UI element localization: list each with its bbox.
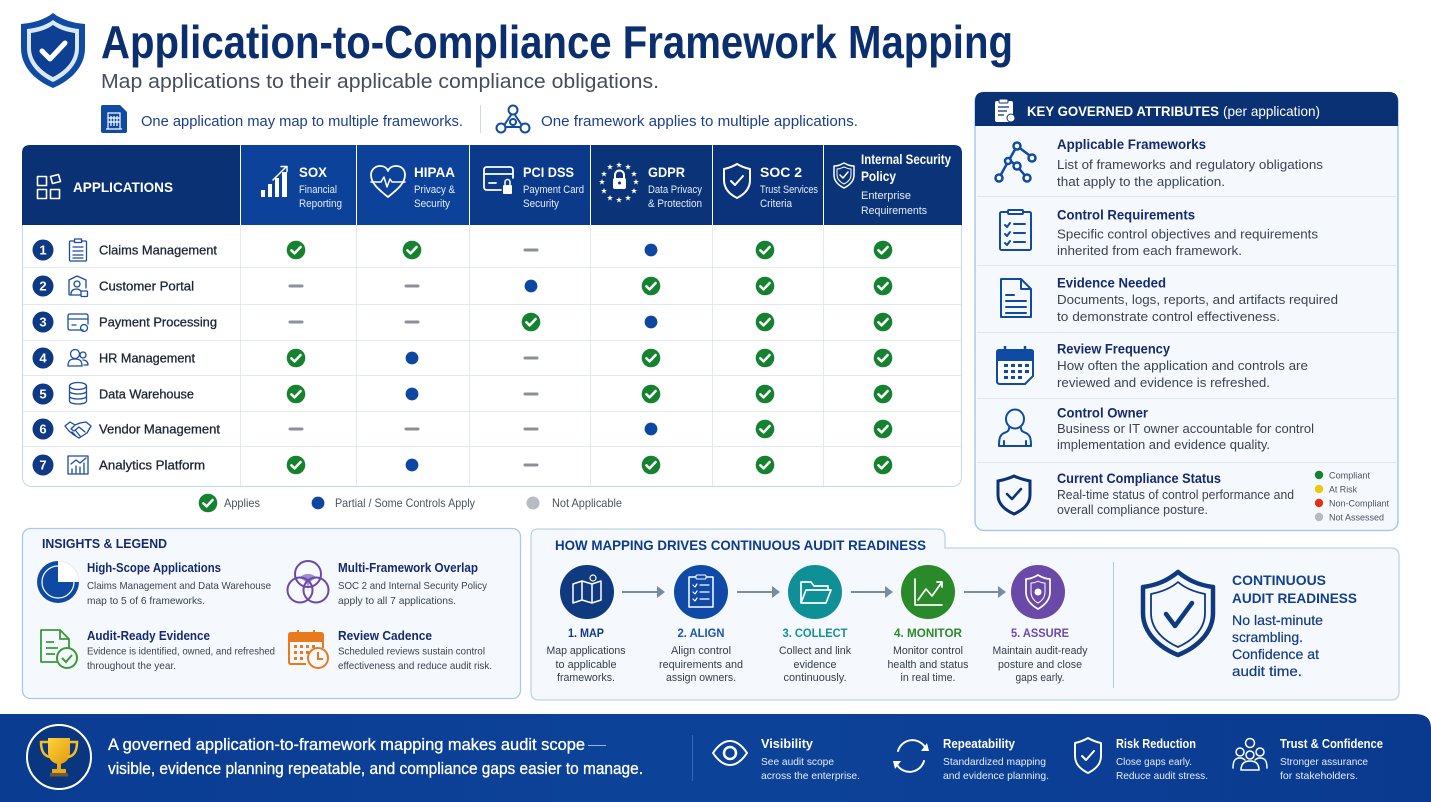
row 1: Claims Management: 1 (39, 242, 47, 258)
insight: high-scope applications (37, 560, 271, 607)
attribute: Control Owner: Control Owner (1057, 406, 1149, 420)
icon: building document (101, 105, 127, 133)
callout: continuous audit readiness: audit time. (1232, 663, 1302, 679)
benefit: risk reduction: Close gaps early. (1116, 756, 1192, 768)
column: GDPR (599, 162, 702, 210)
attribute: Control Owner: Business or IT owner accountable for control (1057, 421, 1314, 436)
benefit: risk reduction: Risk Reduction (1116, 737, 1196, 751)
attribute: Review Frequency: reviewed and evidence is refreshed. (1057, 375, 1270, 390)
column: SOC 2: SOC 2 (760, 164, 802, 180)
step 2: align: requirements and (659, 659, 743, 671)
step 4: monitor: in real time. (900, 672, 956, 684)
column: GDPR: GDPR (648, 164, 685, 180)
attribute: Current Compliance Status: Current Compliance Status (1057, 471, 1221, 486)
attribute: Control Requirements: Control Requirements (1057, 208, 1195, 222)
step 1: map: Map applications (546, 645, 626, 657)
callout: continuous audit readiness: Confidence at (1232, 646, 1319, 662)
row 5: Data Warehouse: Data Warehouse (99, 386, 194, 402)
attribute: Control Requirements: Specific control objectives and requirements (1057, 226, 1319, 242)
key point: one application to many frameworks: One application may map to multiple frameworks. (141, 113, 463, 130)
step 5: assure (992, 565, 1088, 684)
attribute: Applicable Frameworks (996, 137, 1324, 189)
applications header (38, 174, 173, 198)
row 7: Analytics Platform: 7 (39, 458, 47, 472)
benefit: repeatability: Repeatability (943, 737, 1015, 751)
icon: large shield (1143, 572, 1213, 655)
callout: continuous audit readiness: scrambling. (1232, 629, 1303, 645)
insight: high-scope applications: Claims Management and Data Warehouse (87, 580, 271, 592)
panel header: (per application) (1223, 103, 1320, 119)
attribute: Review Frequency: How often the application and controls are (1057, 358, 1308, 373)
step 3: collect: 3. COLLECT (782, 626, 848, 640)
footer banner (0, 714, 1431, 802)
benefit: repeatability: Standardized mapping (943, 756, 1046, 768)
panel: insights and legend: INSIGHTS & LEGEND (42, 536, 167, 551)
column: HIPAA (371, 164, 456, 210)
column: PCI DSS (484, 164, 584, 210)
attribute: Control Owner: implementation and evidence quality. (1057, 437, 1270, 452)
row 6: Vendor Management: Vendor Management (99, 422, 220, 436)
step 5: assure: 5. ASSURE (1011, 626, 1069, 640)
step 2: align: 2. ALIGN (678, 626, 724, 640)
column: Internal Security Policy: Policy (861, 168, 896, 184)
step 2: align (659, 565, 743, 684)
legend: matrix symbols: Not Applicable (552, 496, 622, 510)
panel: mapping matrix table (22, 145, 962, 486)
column: SOX (261, 164, 342, 210)
arrow (622, 586, 665, 598)
attribute: Current Compliance Status (998, 470, 1389, 524)
row 6: Vendor Management (32, 418, 892, 440)
insight: audit-ready evidence: Audit-Ready Evidence (87, 628, 210, 643)
key point: one framework to many applications (496, 106, 858, 132)
panel: key governed attributes (975, 92, 1398, 530)
step 1: map: frameworks. (557, 672, 615, 684)
column: SOC 2: Criteria (760, 198, 793, 210)
benefit: trust and confidence: for stakeholders. (1280, 770, 1358, 782)
column: HIPAA: HIPAA (414, 164, 455, 180)
step 4: monitor: health and status (888, 659, 969, 671)
benefit: trust and confidence (1233, 737, 1383, 782)
row 3: Payment Processing: Payment Processing (99, 314, 217, 330)
attribute: Control Requirements: inherited from each framework. (1057, 243, 1242, 258)
insight: multi-framework overlap: Multi-Framework Overlap (338, 560, 478, 575)
step 5: assure: Maintain audit-ready (992, 645, 1088, 657)
column: HIPAA: Privacy & (414, 184, 456, 196)
row 2: Customer Portal: 2 (39, 278, 47, 294)
arrow (737, 586, 780, 598)
status legend: Non-Compliant (1329, 498, 1389, 510)
benefit: trust and confidence: Trust & Confidence (1280, 737, 1383, 751)
insight: audit-ready evidence: throughout the year. (87, 660, 176, 672)
attribute: Review Frequency (997, 342, 1308, 390)
subtitle: Map applications to their applicable compliance obligations. (101, 71, 659, 93)
title: Application-to-Compliance Framework Mapping (101, 16, 1013, 68)
legend: matrix symbols (199, 494, 622, 512)
column: GDPR: & Protection (648, 198, 702, 210)
benefit: visibility: See audit scope (761, 756, 834, 768)
insight: review cadence: Scheduled reviews sustain control (338, 646, 485, 658)
column: Internal Security Policy: Requirements (861, 205, 927, 217)
step 4: monitor (888, 565, 969, 684)
insight: review cadence: Review Cadence (338, 628, 432, 643)
step 4: monitor: 4. MONITOR (894, 626, 962, 640)
row 5: Data Warehouse: 5 (39, 386, 47, 402)
insight: multi-framework overlap: SOC 2 and Internal Security Policy (338, 580, 488, 592)
column: Internal Security Policy: Enterprise (861, 190, 911, 202)
legend: matrix symbols: Applies (224, 496, 260, 510)
benefit: visibility: across the enterprise. (761, 770, 860, 782)
legend: matrix symbols: Partial / Some Controls Apply (335, 496, 475, 510)
step 1: map: to applicable (556, 659, 616, 671)
attribute: Current Compliance Status: Real-time status of control performance and (1057, 487, 1294, 502)
callout: continuous audit readiness: AUDIT READINESS (1232, 590, 1357, 606)
row 6: Vendor Management: 6 (39, 422, 47, 436)
panel: how mapping drives continuous audit readiness: HOW MAPPING DRIVES CONTINUOUS AUDIT READINESS (555, 537, 926, 553)
step 5: assure: gaps early. (1016, 672, 1064, 684)
row 4: HR Management: 4 (39, 350, 47, 366)
benefit: repeatability (893, 737, 1049, 782)
step 1: map: 1. MAP (568, 626, 604, 640)
row 4: HR Management: HR Management (99, 350, 195, 366)
step 3: collect: Collect and link (779, 645, 851, 657)
panel: how mapping drives continuous audit readiness (531, 529, 1399, 700)
step 3: collect: evidence (794, 659, 836, 671)
column: SOX: SOX (299, 164, 328, 180)
column: SOC 2: Trust Services (760, 184, 818, 196)
attribute: Control Requirements (1000, 208, 1319, 258)
status legend: Compliant (1329, 470, 1370, 482)
applications header: APPLICATIONS (73, 179, 173, 195)
panel header (975, 92, 1398, 126)
benefit: risk reduction: Reduce audit stress. (1116, 770, 1208, 782)
row 7: Analytics Platform: Analytics Platform (99, 458, 205, 472)
insight: review cadence: effectiveness and reduce audit risk. (338, 660, 492, 672)
column: HIPAA: Security (414, 198, 450, 210)
step 5: assure: posture and close (998, 659, 1082, 671)
insight: audit-ready evidence: Evidence is identified, owned, and refreshed (87, 646, 275, 658)
column: Internal Security Policy (834, 151, 951, 217)
status legend: At Risk (1329, 484, 1357, 496)
column: SOC 2 (724, 164, 818, 210)
table header (22, 145, 962, 225)
footer banner: A governed application-to-framework mapping makes audit scope (108, 735, 585, 754)
row 1: Claims Management (32, 239, 892, 261)
row 4: HR Management (32, 348, 892, 368)
column: PCI DSS: Payment Card (523, 184, 584, 196)
column: PCI DSS: Security (523, 198, 559, 210)
row 2: Customer Portal (32, 276, 892, 296)
row 2: Customer Portal: Customer Portal (99, 278, 194, 294)
callout: continuous audit readiness (1143, 572, 1357, 679)
benefit: visibility: Visibility (761, 737, 813, 751)
row 7: Analytics Platform (32, 454, 892, 476)
insight: review cadence (289, 628, 492, 672)
insight: multi-framework overlap: apply to all 7 applications. (338, 595, 456, 607)
step 3: collect: continuously. (784, 672, 846, 684)
insight: audit-ready evidence (41, 628, 275, 672)
column: SOX: Reporting (299, 198, 342, 210)
column: PCI DSS: PCI DSS (523, 164, 574, 180)
insight: high-scope applications: High-Scope Applications (87, 560, 221, 575)
attribute: Current Compliance Status: overall compliance posture. (1057, 502, 1208, 517)
status legend: Not Assessed (1329, 512, 1384, 524)
column: SOX: Financial (299, 184, 337, 196)
step 3: collect (779, 565, 851, 684)
icon: brand shield (21, 13, 85, 88)
callout: continuous audit readiness: CONTINUOUS (1232, 572, 1326, 588)
attribute: Evidence Needed (1001, 276, 1338, 324)
attribute: Applicable Frameworks: that apply to the application. (1057, 174, 1225, 189)
benefit: risk reduction (1075, 737, 1208, 782)
attribute: Applicable Frameworks: List of frameworks and regulatory obligations (1057, 157, 1324, 172)
attribute: Evidence Needed: to demonstrate control effectiveness. (1057, 309, 1280, 324)
column: GDPR: Data Privacy (648, 184, 702, 196)
panel: insights and legend (22, 528, 520, 698)
icon: trophy (27, 725, 91, 789)
row 1: Claims Management: Claims Management (99, 242, 217, 258)
row 5: Data Warehouse (32, 382, 892, 404)
insight: high-scope applications: map to 5 of 6 frameworks. (87, 595, 205, 607)
status legend (1315, 470, 1389, 524)
step 1: map (546, 565, 626, 684)
arrow (851, 586, 893, 598)
arrow (964, 586, 1006, 598)
step 2: align: assign owners. (666, 672, 736, 684)
key point: one application to many frameworks (101, 105, 463, 133)
insight: multi-framework overlap (288, 560, 488, 607)
key point: one framework to many applications: One framework applies to multiple applications. (541, 113, 858, 130)
footer banner: visible, evidence planning repeatable, and compliance gaps easier to manage. (108, 759, 643, 778)
icon: network (496, 106, 530, 132)
attribute: Applicable Frameworks: Applicable Frameworks (1057, 137, 1206, 152)
attribute: Evidence Needed: Evidence Needed (1057, 276, 1166, 290)
benefit: visibility (713, 737, 860, 782)
row 3: Payment Processing: 3 (39, 314, 47, 330)
step 2: align: Align control (671, 645, 731, 657)
attribute: Control Owner (999, 406, 1314, 452)
column: Internal Security Policy: Internal Security (861, 151, 951, 167)
benefit: trust and confidence: Stronger assurance (1280, 756, 1368, 768)
step 4: monitor: Monitor control (893, 645, 963, 657)
benefit: repeatability: and evidence planning. (943, 770, 1049, 782)
attribute: Evidence Needed: Documents, logs, reports, and artifacts required (1057, 292, 1338, 307)
panel header: KEY GOVERNED ATTRIBUTES (1027, 103, 1219, 119)
attribute: Review Frequency: Review Frequency (1057, 342, 1170, 356)
row 3: Payment Processing (32, 312, 892, 332)
callout: continuous audit readiness: No last-minute (1232, 612, 1323, 628)
